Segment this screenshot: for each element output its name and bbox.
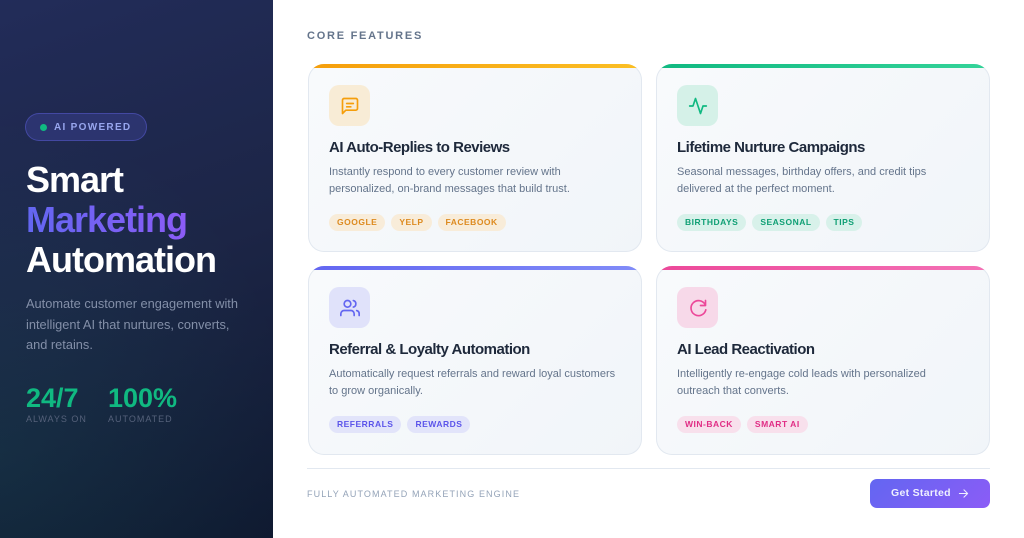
card description: to grow organically. (329, 384, 423, 396)
panel: AI auto-replies (308, 64, 642, 252)
icon: users (329, 287, 370, 328)
stat value: 24/7 (26, 383, 79, 413)
card description: personalized, on-brand messages that build trust. (329, 182, 570, 194)
card description: outreach that converts. (677, 384, 789, 396)
stat label: AUTOMATED (108, 414, 173, 424)
icon: arrow (958, 489, 968, 498)
stat label: ALWAYS ON (26, 414, 87, 424)
card description (329, 166, 570, 194)
stat value: 100% (108, 383, 177, 413)
button label: Get Started (891, 487, 951, 499)
panel: referral and loyalty (308, 266, 642, 455)
tags: FACEBOOK (446, 217, 498, 227)
tags (677, 214, 862, 231)
button: get started (870, 479, 990, 508)
tags: REFERRALS (337, 419, 393, 429)
stat: automated (108, 383, 177, 424)
tags: GOOGLE (337, 217, 377, 227)
title (26, 159, 216, 280)
card title: Referral & Loyalty Automation (329, 340, 530, 358)
footer tagline: FULLY AUTOMATED MARKETING ENGINE (307, 489, 520, 499)
tags: SEASONAL (760, 217, 812, 227)
icon: activity pulse (677, 85, 718, 126)
icon: green status dot (40, 124, 47, 131)
panel: lead reactivation (656, 266, 990, 455)
badge label: AI POWERED (54, 122, 131, 133)
text block: intro description: and retains. (26, 337, 93, 352)
tags: SMART AI (755, 419, 800, 429)
icon: message (329, 85, 370, 126)
tags: WIN-BACK (685, 419, 733, 429)
card description: Seasonal messages, birthday offers, and credit tips (677, 166, 926, 178)
text block: intro description: Automate customer engagement with (26, 296, 238, 311)
tags (677, 416, 808, 433)
title: Automation (26, 239, 216, 280)
card description (329, 368, 615, 396)
tags (329, 214, 506, 231)
text block: intro description: intelligent AI that nurtures, converts, (26, 316, 229, 332)
card title: AI Lead Reactivation (677, 340, 815, 358)
heading: core features: CORE FEATURES (307, 30, 423, 42)
card description: Intelligently re-engage cold leads with personalized (677, 368, 926, 380)
tags: REWARDS (415, 419, 462, 429)
card description (677, 166, 926, 194)
title: Smart (26, 159, 123, 200)
tags (329, 416, 470, 433)
card description: delivered at the perfect moment. (677, 182, 835, 194)
title: Marketing (26, 199, 187, 240)
card description: Instantly respond to every customer review with (329, 166, 561, 178)
card description: Automatically request referrals and reward loyal customers (329, 368, 615, 380)
stat: always on (26, 383, 87, 424)
tags: BIRTHDAYS (685, 217, 738, 227)
card title: AI Auto-Replies to Reviews (329, 138, 510, 156)
text block: intro description (26, 296, 238, 352)
card description (677, 368, 926, 396)
badge: AI powered (25, 113, 147, 141)
icon: refresh (677, 287, 718, 328)
card title: Lifetime Nurture Campaigns (677, 138, 865, 156)
tags: TIPS (834, 217, 854, 227)
tags: YELP (399, 217, 424, 227)
panel: left hero sidebar (0, 0, 273, 538)
panel: lifetime nurture (656, 64, 990, 252)
